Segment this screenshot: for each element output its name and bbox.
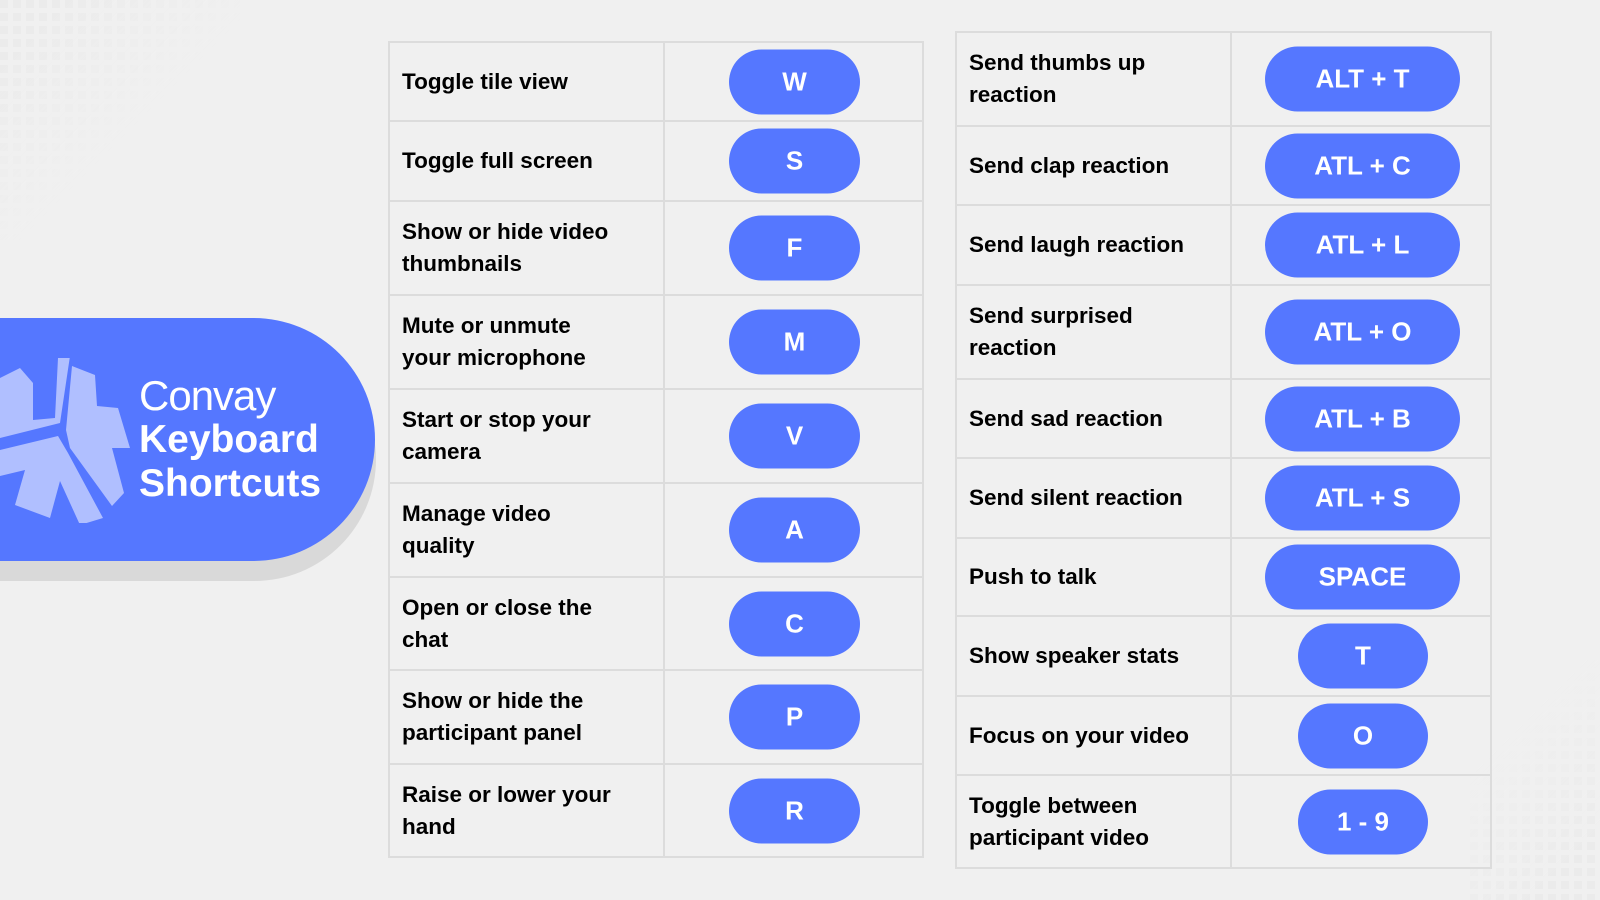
row: V: camera [402,439,481,464]
row: V: Start or stop your [402,407,591,432]
row: O: Focus on your video [969,722,1189,748]
row: M: your microphone [402,345,586,370]
panel: right shortcuts table [955,31,1492,869]
row: R [402,778,860,844]
row: ALT + T [957,33,1490,127]
row: SPACE: Push to talk [969,564,1097,589]
row: P [390,671,922,765]
row: ALT + T: reaction [969,82,1057,107]
row: C: chat [402,626,448,652]
row: V: V [786,420,803,450]
row: ATL + S [957,459,1490,539]
row: ATL + L: Send laugh reaction [969,232,1184,257]
row: A: Manage video [402,501,551,526]
row: ATL + S: ATL + S [1315,482,1410,512]
row: C: C [785,608,804,638]
row: M: M [784,326,805,356]
row: 1 - 9 [969,790,1428,854]
row: W: W [782,66,807,96]
row: V [390,390,922,484]
title text: Convay [139,372,275,419]
row: T [957,617,1490,697]
row: ATL + O: Send surprised [969,303,1133,328]
row: ATL + L: ATL + L [1316,230,1409,260]
banner: Convay Keyboard Shortcuts [0,318,376,581]
row: C: Open or close the [402,594,592,620]
row: F: thumbnails [402,251,522,276]
row: S [390,122,922,202]
row: F: Show or hide video [402,219,608,244]
row: ATL + C: Send clap reaction [969,152,1169,178]
decorative pixels top-left [0,0,240,240]
row: 1 - 9: 1 - 9 [1337,806,1389,836]
row: A [390,484,922,578]
row: S: Toggle full screen [402,148,593,173]
row: P: Show or hide the [402,688,583,713]
row: M: Mute or unmute [402,313,571,338]
row: O: O [1353,720,1373,750]
row: C [390,578,922,671]
row: S: S [786,146,803,176]
row: ATL + B: Send sad reaction [969,406,1163,430]
row: A: quality [402,533,475,558]
row: P: participant panel [402,720,582,745]
row: R: R [785,795,804,825]
row: R: Raise or lower your [402,782,611,806]
row: F: F [787,232,802,262]
title text [139,372,321,505]
row: P: P [786,702,803,732]
row: ATL + C: ATL + C [1314,150,1411,180]
row: T: Show speaker stats [969,643,1179,668]
row: ATL + B [957,380,1490,459]
row: SPACE: SPACE [1319,562,1406,592]
title text: Shortcuts [139,462,321,505]
row: M [390,296,922,390]
row: ATL + O: ATL + O [1314,316,1412,346]
decorative pixels bottom-right [1470,660,1600,900]
row: ALT + T: Send thumbs up [969,50,1145,75]
row: ATL + L [957,206,1490,286]
row: W: Toggle tile view [402,68,568,94]
row: W [390,43,922,122]
row: ALT + T: ALT + T [1315,64,1410,94]
row: R: hand [402,814,456,838]
panel: left shortcuts table [388,41,924,858]
row: ATL + O: reaction [969,335,1057,360]
row: ATL + B: ATL + B [1314,403,1411,433]
row: 1 - 9: participant video [969,824,1149,850]
row: A: A [785,514,804,544]
row: O [957,697,1490,776]
icon: Convay logo [0,358,130,523]
row: F [390,202,922,296]
row: T: T [1355,640,1371,670]
title text: Keyboard [139,418,319,461]
row: SPACE [957,539,1490,617]
row: ATL + O [957,286,1490,380]
row: 1 - 9: Toggle between [969,792,1137,818]
row: ATL + C [957,127,1490,206]
row: ATL + S: Send silent reaction [969,485,1183,510]
